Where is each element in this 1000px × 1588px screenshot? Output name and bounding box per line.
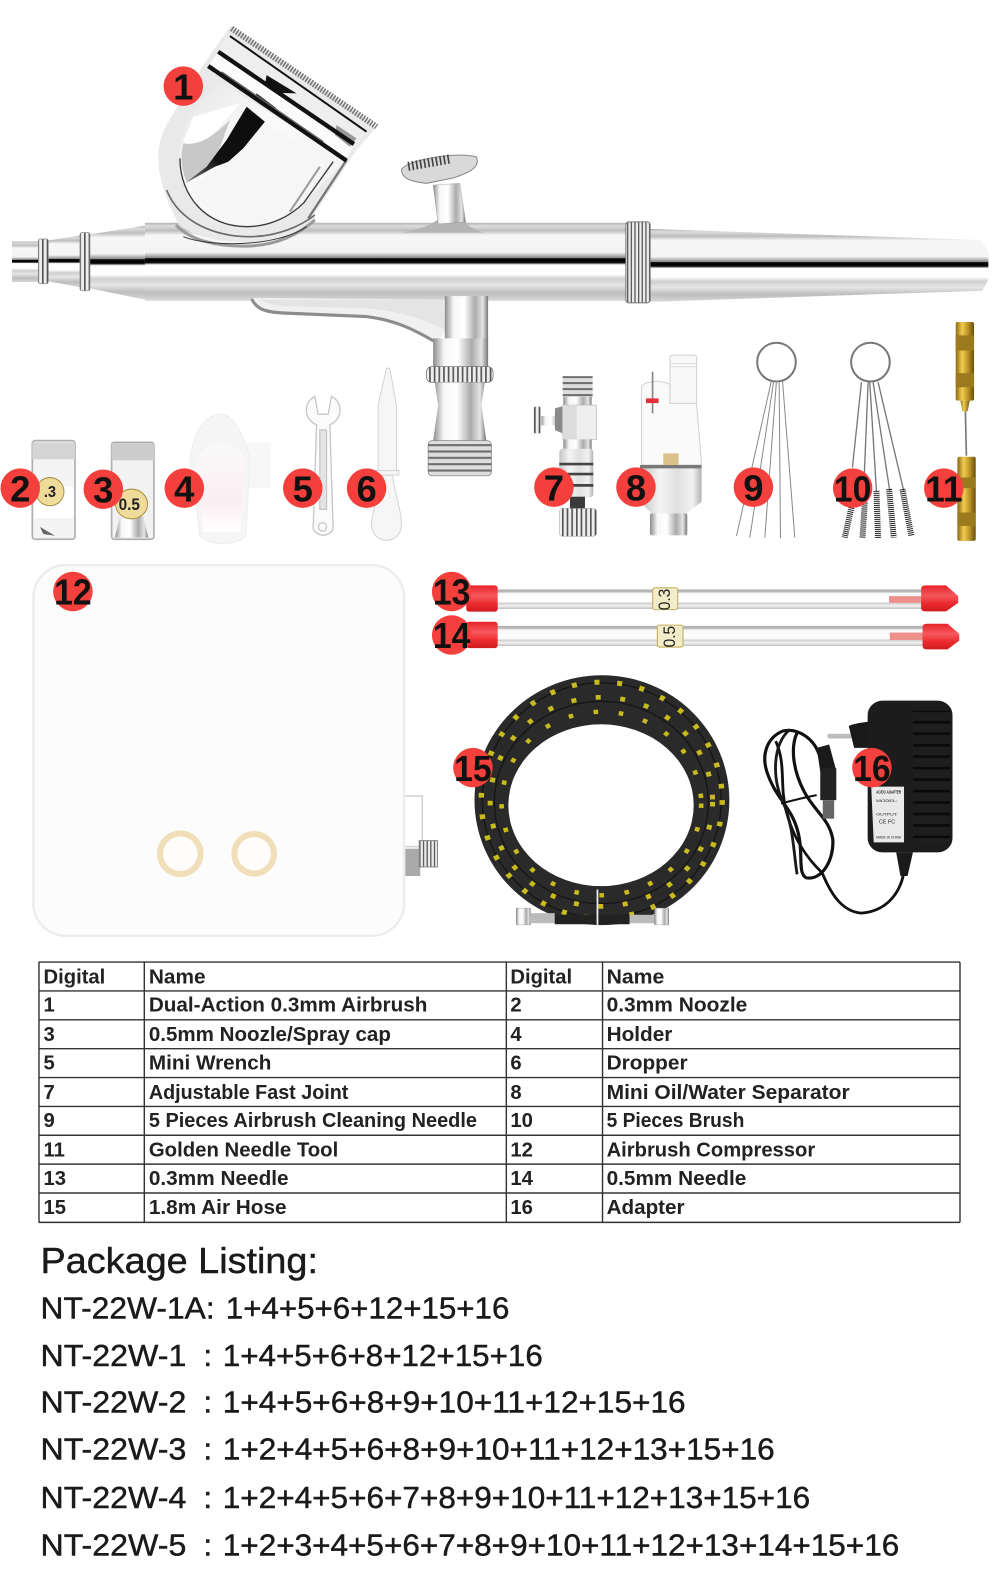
- listing NT-22W-3: :: [204, 1431, 212, 1466]
- main airbrush: [12, 23, 988, 476]
- item 5 mini wrench: [306, 397, 340, 535]
- small parts row right: [736, 322, 976, 541]
- listing NT-22W-2: :: [204, 1385, 212, 1420]
- table row 8: 16: [510, 1197, 533, 1219]
- table row 3: Mini Wrench: [149, 1052, 271, 1074]
- tail cone: [650, 229, 988, 302]
- paint cup: [158, 23, 377, 246]
- badge 4: [165, 468, 204, 509]
- table row 8: [44, 1197, 685, 1219]
- item 16 power adapter: [765, 701, 952, 913]
- table header row: [44, 966, 664, 988]
- listing NT-22W-1A: 1+4+5+6+12+15+16: [226, 1291, 509, 1326]
- nozzle tip and cone: [12, 226, 145, 300]
- badge 4: 4: [174, 468, 195, 509]
- table row 1: 2: [510, 995, 522, 1017]
- item 6 dropper: [371, 368, 401, 540]
- item 10 cleaning brushes: [845, 343, 911, 538]
- badge 3: [84, 469, 123, 510]
- item 3 nozzle vial: 0.5: [119, 497, 140, 514]
- listing NT-22W-4: :: [204, 1480, 212, 1515]
- table row 3: 6: [510, 1052, 522, 1074]
- table row 5: 10: [510, 1110, 533, 1132]
- adapter label: MODEL:: [876, 798, 898, 803]
- table row 7: 14: [510, 1168, 534, 1190]
- item 7 adjustable fast joint: [533, 376, 597, 536]
- parts table: [38, 962, 960, 1222]
- table row 4: [44, 1082, 850, 1104]
- table row 2: 4: [510, 1024, 522, 1046]
- listing NT-22W-1A: NT-22W-1A:: [41, 1291, 215, 1326]
- listing NT-22W-2: NT-22W-2: [41, 1385, 186, 1420]
- badge 3: 3: [93, 469, 113, 510]
- badge 1: [164, 66, 203, 107]
- table row 2: [44, 1024, 673, 1046]
- adapter label: AC/DC ADAPTER: [876, 790, 901, 795]
- adapter label: OUTPUT:: [876, 811, 898, 816]
- table row 8: 1.8m Air Hose: [149, 1197, 287, 1219]
- table row 7: [44, 1168, 746, 1190]
- badge 8: [616, 467, 656, 508]
- listing NT-22W-3: NT-22W-3: [41, 1431, 186, 1466]
- item 13 0.3mm needle: [466, 585, 958, 612]
- table row 8: Adapter: [607, 1197, 685, 1219]
- item 15 air hose: [474, 675, 729, 925]
- table row 3: [44, 1052, 688, 1074]
- table header row: Digital: [44, 966, 105, 988]
- table row 6: [44, 1140, 815, 1162]
- airbrush barrel: [145, 223, 626, 301]
- package listing heading: Package Listing:: [41, 1240, 318, 1281]
- item 8 oil water separator: [640, 355, 702, 535]
- item 14 0.5mm needle: [466, 622, 959, 649]
- listing NT-22W-1: 1+4+5+6+8+12+15+16: [223, 1338, 543, 1373]
- badge 6: [347, 468, 386, 509]
- table row 4: Adjustable Fast Joint: [149, 1082, 349, 1104]
- listing NT-22W-5: :: [204, 1528, 212, 1563]
- package listing: [41, 1240, 899, 1563]
- badge 8: 8: [626, 467, 646, 508]
- item 11 golden needle tool: [956, 322, 976, 541]
- table row 1: [44, 995, 747, 1017]
- table row 6: 11: [44, 1140, 65, 1162]
- table row 1: Dual-Action 0.3mm Airbrush: [149, 995, 427, 1017]
- table row 7: 13: [44, 1168, 66, 1190]
- needles, hose and adapter: [466, 585, 959, 925]
- table row 5: [44, 1110, 744, 1132]
- table header row: Name: [607, 966, 664, 988]
- table row 7: 0.3mm Needle: [149, 1168, 289, 1190]
- listing NT-22W-3: 1+2+4+5+6+8+9+10+11+12+13+15+16: [223, 1431, 775, 1466]
- air valve body: [426, 296, 493, 476]
- badge 11: 11: [925, 468, 963, 509]
- table row 6: Golden Needle Tool: [149, 1140, 338, 1162]
- table row 3: Dropper: [607, 1052, 688, 1074]
- badge 2: 2: [10, 468, 30, 509]
- table row 4: 8: [510, 1082, 522, 1104]
- listing NT-22W-2: 1+4+5+6+8+9+10+11+12+15+16: [223, 1385, 686, 1420]
- item 12 airbrush compressor: [33, 565, 437, 936]
- table row 5: 5 Pieces Airbrush Cleaning Needle: [149, 1110, 477, 1132]
- table row 1: 0.3mm Noozle: [607, 995, 747, 1017]
- item 9 cleaning needles: [736, 343, 796, 538]
- table row 7: 0.5mm Needle: [607, 1168, 746, 1190]
- adapter label: CE FC: [879, 820, 895, 825]
- table header row: Name: [149, 966, 206, 988]
- table row 5: 9: [44, 1110, 55, 1132]
- listing NT-22W-5: NT-22W-5: [41, 1528, 186, 1563]
- badge 9: 9: [743, 467, 764, 508]
- badge 7: 7: [544, 467, 564, 508]
- badge 13: 13: [433, 572, 470, 613]
- badge 5: 5: [293, 468, 313, 509]
- listing NT-22W-4: NT-22W-4: [41, 1480, 186, 1515]
- badge 1: 1: [173, 66, 193, 107]
- badge 6: 6: [356, 468, 377, 509]
- number badges: [1, 66, 964, 789]
- table row 6: Airbrush Compressor: [607, 1140, 815, 1162]
- item 3 nozzle vial: [112, 442, 154, 539]
- table header row: Digital: [510, 966, 572, 988]
- air valve knob: [401, 155, 483, 233]
- item 2 nozzle vial: [32, 441, 75, 539]
- adapter label: MADE IN CHINA: [876, 834, 901, 839]
- badge 16: 16: [853, 748, 891, 789]
- items 7 and 8: [533, 355, 702, 536]
- adapter label: [871, 787, 904, 842]
- badge 2: [1, 468, 40, 509]
- table row 2: 0.5mm Noozle/Spray cap: [149, 1024, 391, 1046]
- table row 8: 15: [44, 1197, 66, 1219]
- listing NT-22W-5: 1+2+3+4+5+6+7+8+9+10+11+12+13+14+15+16: [223, 1528, 899, 1563]
- listing NT-22W-1: :: [204, 1338, 212, 1373]
- table row 5: 5 Pieces Brush: [607, 1110, 744, 1132]
- table row 4: Mini Oil/Water Separator: [607, 1082, 850, 1104]
- badge 9: [734, 467, 773, 508]
- item 14 0.5mm needle: 0.5: [661, 626, 679, 647]
- small parts row left: [32, 368, 401, 544]
- listing NT-22W-1: [41, 1338, 543, 1373]
- table row 3: 5: [44, 1052, 55, 1074]
- item 4 holder: [190, 414, 271, 544]
- table row 1: 1: [44, 995, 55, 1017]
- badge 5: [283, 468, 323, 509]
- badge 12: 12: [54, 572, 92, 613]
- knurled collar: [626, 222, 650, 303]
- item 13 0.3mm needle: 0.3: [657, 589, 674, 610]
- table row 4: 7: [44, 1082, 55, 1104]
- badge 7: [534, 467, 574, 508]
- table row 2: 3: [44, 1024, 55, 1046]
- listing NT-22W-1A: [41, 1291, 509, 1326]
- listing NT-22W-4: 1+2+4+5+6+7+8+9+10+11+12+13+15+16: [223, 1480, 810, 1515]
- table row 2: Holder: [607, 1024, 673, 1046]
- listing NT-22W-1: NT-22W-1: [41, 1338, 186, 1373]
- item 2 nozzle vial: .3: [44, 484, 56, 501]
- trigger lever: [252, 298, 446, 344]
- badge 10: 10: [834, 468, 871, 509]
- badge 15: 15: [454, 748, 492, 789]
- badge 14: 14: [433, 615, 471, 656]
- table row 6: 12: [510, 1140, 533, 1162]
